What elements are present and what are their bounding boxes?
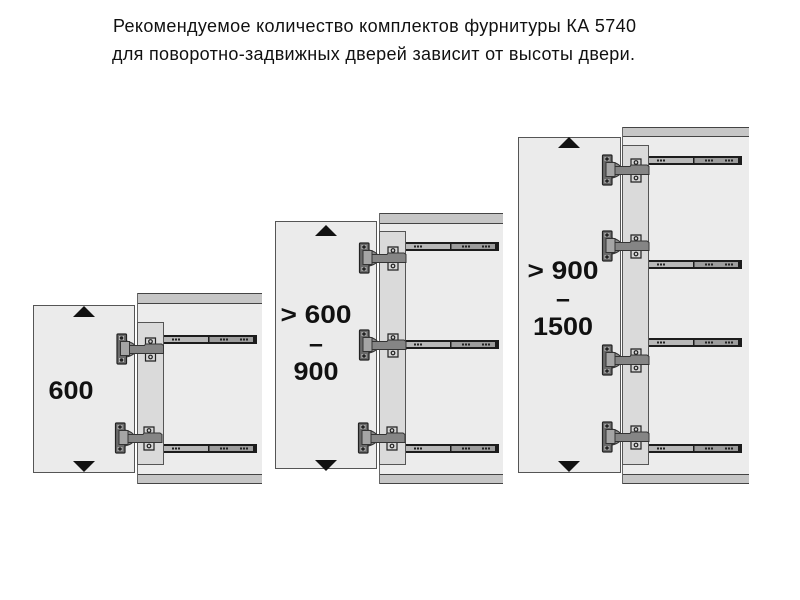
drawer rail 3 <box>649 338 742 347</box>
door <box>276 222 376 468</box>
hinge 2 <box>602 231 649 261</box>
hinge bottom <box>358 423 405 453</box>
cabinet side <box>622 127 749 484</box>
arrow down <box>73 461 95 472</box>
drawer rail 2 <box>649 260 742 269</box>
drawer rail middle <box>406 340 499 349</box>
height label: 900 <box>294 358 338 386</box>
arrow up <box>315 225 337 236</box>
hinge 4 <box>602 422 649 452</box>
height label <box>528 257 598 341</box>
title: для поворотно-задвижных дверей зависит от высоты двери. <box>112 44 635 64</box>
door panel <box>138 322 164 464</box>
cabinet side <box>379 213 503 484</box>
height label: 1500 <box>533 313 593 341</box>
drawer rail 1 <box>649 156 742 165</box>
height label <box>280 301 352 386</box>
arrow down <box>558 461 580 472</box>
arrow up <box>73 306 95 317</box>
drawer rail 4 <box>649 444 742 453</box>
height label: – <box>309 330 323 358</box>
drawer rail top <box>406 242 499 251</box>
panel: door height 900 to 1500 <box>518 127 749 484</box>
height label: 600 <box>48 377 94 405</box>
door <box>34 306 134 472</box>
arrow up <box>558 137 580 148</box>
panel: door height 600 to 900 <box>276 213 503 484</box>
arrow down <box>315 460 337 471</box>
title: Рекомендуемое количество комплектов фурнитуры КА 5740 <box>113 16 636 36</box>
drawer rail top <box>164 335 257 344</box>
hinge bottom <box>116 423 162 453</box>
drawer rail bottom <box>406 444 499 453</box>
height label: > 600 <box>280 301 352 329</box>
height label: > 900 <box>528 257 598 285</box>
door panel <box>622 146 648 464</box>
hinge middle <box>360 330 406 360</box>
title <box>112 16 636 64</box>
panel: door height 600 <box>34 293 262 484</box>
hinge 3 <box>602 345 649 375</box>
hinge 1 <box>602 155 649 185</box>
hinge top <box>117 334 164 364</box>
height label: – <box>556 285 570 313</box>
door panel <box>380 232 406 464</box>
cabinet side <box>137 293 262 484</box>
drawer rail bottom <box>164 444 257 453</box>
door <box>518 138 620 472</box>
hinge top <box>360 243 406 273</box>
